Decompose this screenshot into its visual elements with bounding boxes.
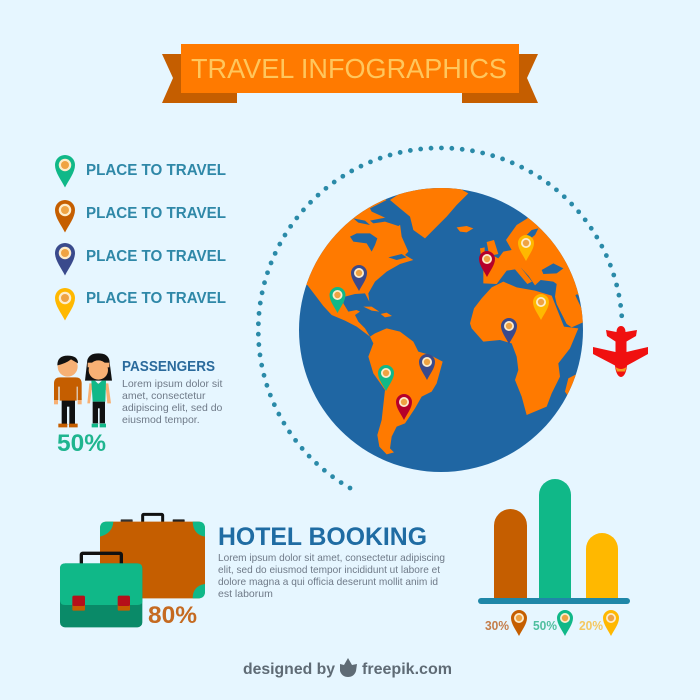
- label 20%: 20%: [579, 619, 603, 633]
- map pin green, Peru: [378, 365, 394, 391]
- British Isles: [487, 240, 498, 256]
- North America: [306, 199, 414, 336]
- bar 50%: [539, 479, 571, 598]
- legend item green: [55, 155, 226, 188]
- legend item brown: PLACE TO TRAVEL: [86, 205, 226, 222]
- hotel booking text: elit, sed do eiusmod tempor incididunt ut labore et: [218, 564, 440, 576]
- map pin yellow, Egypt: [533, 294, 549, 320]
- brown suitcase: [100, 514, 205, 598]
- icon: freepik logo: [340, 658, 357, 677]
- bar 30%: [494, 509, 527, 598]
- legend item brown: [55, 200, 226, 232]
- passengers text: amet, consectetur: [122, 390, 206, 402]
- green bag: [60, 553, 142, 627]
- label 50%: [533, 610, 573, 636]
- legend item green: PLACE TO TRAVEL: [86, 162, 226, 179]
- map pin green, Mexico: [330, 287, 346, 313]
- map pin navy, Brazil: [419, 354, 435, 380]
- passengers text: adipiscing elit, sed do: [122, 402, 223, 414]
- passengers heading: PASSENGERS: [122, 359, 215, 375]
- passengers illustration: [54, 353, 112, 427]
- passengers percentage: 50%: [57, 430, 106, 457]
- Iceland: [457, 226, 473, 232]
- Eurasia: [483, 218, 583, 328]
- footer credit: designed by: [243, 661, 335, 678]
- Madagascar: [564, 374, 576, 396]
- man: [54, 356, 82, 427]
- dotted flight path: [258, 148, 622, 488]
- icon: airplane: [593, 326, 648, 377]
- legend item yellow: PLACE TO TRAVEL: [86, 290, 226, 307]
- woman: [85, 353, 112, 427]
- map pin navy, USA: [351, 265, 367, 291]
- map pin yellow, Europe: [518, 235, 534, 261]
- map pin red, Spain: [479, 251, 495, 277]
- label 30%: [485, 610, 527, 636]
- title: TRAVEL INFOGRAPHICS: [191, 53, 507, 84]
- bar 20%: [586, 533, 618, 598]
- hotel booking heading: HOTEL BOOKING: [218, 523, 427, 551]
- infographic canvas: [54, 44, 648, 678]
- label 20%: [579, 610, 619, 636]
- chart baseline: [478, 598, 630, 604]
- legend item navy: PLACE TO TRAVEL: [86, 248, 226, 265]
- luggage illustration: [60, 514, 205, 627]
- title banner: [162, 44, 538, 103]
- legend item navy: [55, 243, 226, 276]
- hotel booking text: Lorem ipsum dolor sit amet, consectetur adipiscing: [218, 552, 445, 564]
- Greenland: [390, 187, 468, 238]
- hotel booking text: dolore magna a qui officia deserunt mollit anim id: [218, 576, 438, 588]
- Caribbean islands: [363, 307, 379, 312]
- legend: places to travel: [55, 155, 226, 320]
- bar chart: [478, 479, 630, 636]
- label 50%: 50%: [533, 619, 557, 633]
- map pin red, Argentina: [396, 394, 412, 420]
- label 30%: 30%: [485, 619, 509, 633]
- Africa: [470, 282, 578, 415]
- footer credit: freepik.com: [362, 661, 452, 678]
- hotel booking text: est laborum: [218, 588, 273, 600]
- South America: [368, 328, 443, 454]
- footer credit: [243, 658, 452, 678]
- globe: [299, 188, 583, 472]
- passengers text: Lorem ipsum dolor sit: [122, 378, 222, 390]
- map pin navy, West Africa: [501, 318, 517, 344]
- legend item yellow: [55, 288, 226, 320]
- luggage percentage: 80%: [148, 602, 197, 629]
- passengers text: eiusmod tempor.: [122, 414, 200, 426]
